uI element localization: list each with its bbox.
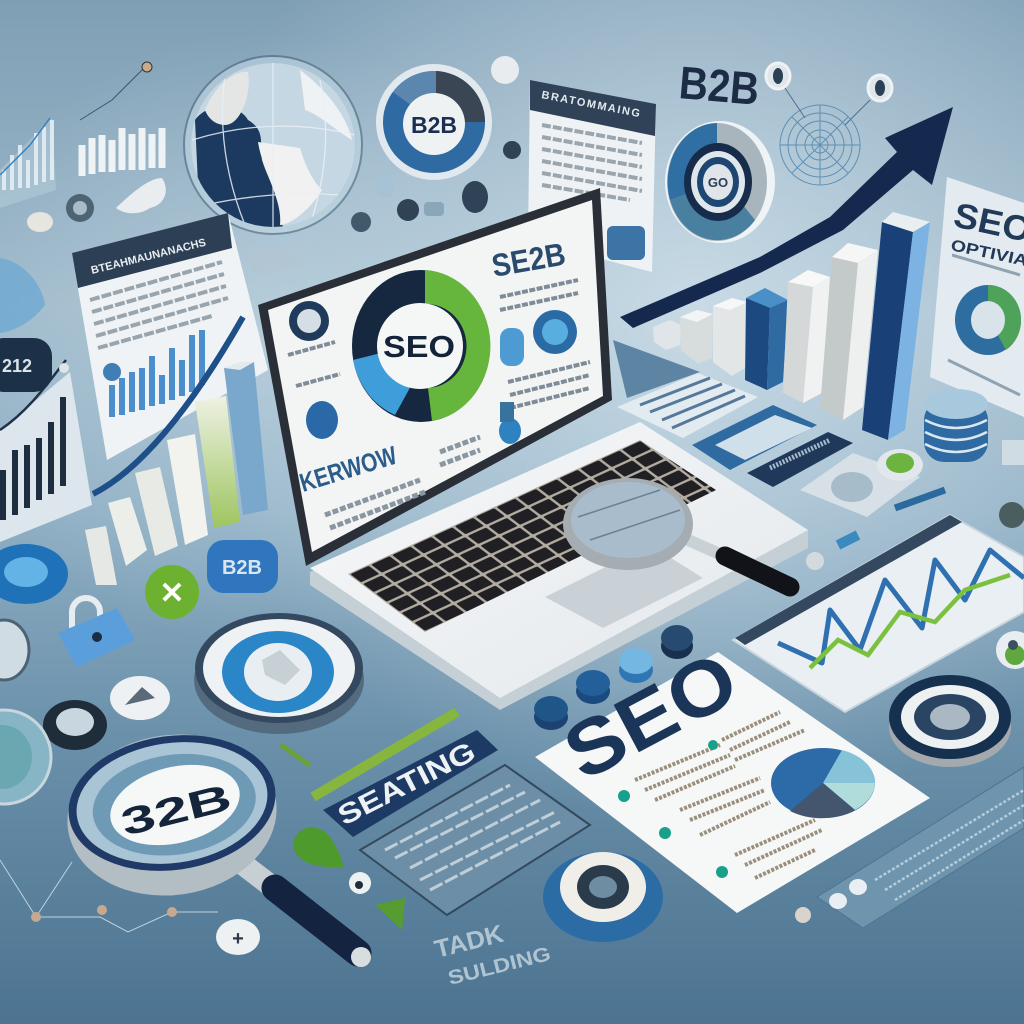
more screen text xyxy=(325,437,480,528)
document: top report xyxy=(528,80,656,272)
icon: magnifier on keyboard xyxy=(563,478,790,587)
icon: target disc right xyxy=(889,675,1011,767)
badge: 212 xyxy=(0,338,52,392)
chart: left line bars xyxy=(0,360,92,542)
label: SE2B: SE2B xyxy=(489,236,568,284)
document: SEO report bottom: SEO xyxy=(550,634,752,797)
icon: radial web xyxy=(780,105,860,185)
icon: small dots top centre xyxy=(245,56,521,275)
icon: small decorations top-left xyxy=(27,178,166,232)
chart: SEO donut xyxy=(352,270,490,422)
banner: SEATING xyxy=(323,730,498,837)
icon: blue badges: ✕ xyxy=(159,577,185,610)
laptop: screen xyxy=(258,188,612,566)
label: B2B heading: B2B xyxy=(677,56,761,115)
panel: document with line chart right xyxy=(733,515,1024,712)
icon: green leaves banner xyxy=(280,712,457,930)
screen text lines xyxy=(288,280,590,408)
icon: bottom small buttons and network: + xyxy=(232,928,244,950)
label: task building xyxy=(432,920,553,990)
label: keyword: KERWOW xyxy=(296,440,401,498)
icon: B2B circle badge: B2B xyxy=(411,112,457,138)
icon: large magnifier xyxy=(57,721,371,967)
document: SEO report bottom xyxy=(535,634,930,913)
chart: top-left line bars xyxy=(0,62,162,208)
chart: rising 3D bars xyxy=(653,212,930,440)
panel: dark text card xyxy=(360,765,590,915)
document: SEO optimization: OPTIVIA xyxy=(949,237,1024,270)
icon: large disc with photo xyxy=(194,613,364,734)
panels: small strips right of laptop xyxy=(613,340,1024,570)
arrow: left curve xyxy=(93,317,243,494)
icon: small discs left xyxy=(0,620,170,804)
icon: left glass dome xyxy=(0,258,45,333)
panel: strip bottom right xyxy=(795,767,1024,928)
icon: target dial xyxy=(665,121,775,243)
icon: blue coins in front of laptop xyxy=(534,625,693,730)
laptop: base and keyboard xyxy=(258,188,808,710)
icon: target dial: GO xyxy=(708,175,728,190)
icon: blue badges xyxy=(0,540,278,619)
document: left report: BTEAHMAUNANACHS xyxy=(90,237,207,277)
chart: left rising bars xyxy=(85,362,268,585)
banner: SEATING: SEATING xyxy=(333,736,480,831)
chart: SEO donut: SEO xyxy=(383,329,455,364)
icon: B2B circle badge xyxy=(376,64,492,180)
label: task building: TADK xyxy=(432,920,506,964)
icon: coin stack xyxy=(924,389,988,462)
badge: 212: 212 xyxy=(2,356,32,376)
icon: screen badges xyxy=(289,301,577,444)
icon: right edge button xyxy=(996,631,1024,669)
icon: blue camera dial xyxy=(543,852,663,942)
arrow: growth xyxy=(620,107,953,328)
document: top report: BRATOMMAING xyxy=(540,89,641,120)
icon: small rings xyxy=(766,63,892,125)
chart: pie xyxy=(771,748,875,818)
icon: padlock xyxy=(58,598,135,667)
label: task building: SULDING xyxy=(446,943,553,990)
icon: large magnifier: 32B xyxy=(117,777,236,845)
document: SEO optimization xyxy=(930,177,1024,417)
icon: globe xyxy=(184,56,362,234)
icon: blue badges: B2B xyxy=(222,557,262,579)
document: left report xyxy=(72,213,268,460)
icon: bottom small buttons and network xyxy=(0,860,371,955)
